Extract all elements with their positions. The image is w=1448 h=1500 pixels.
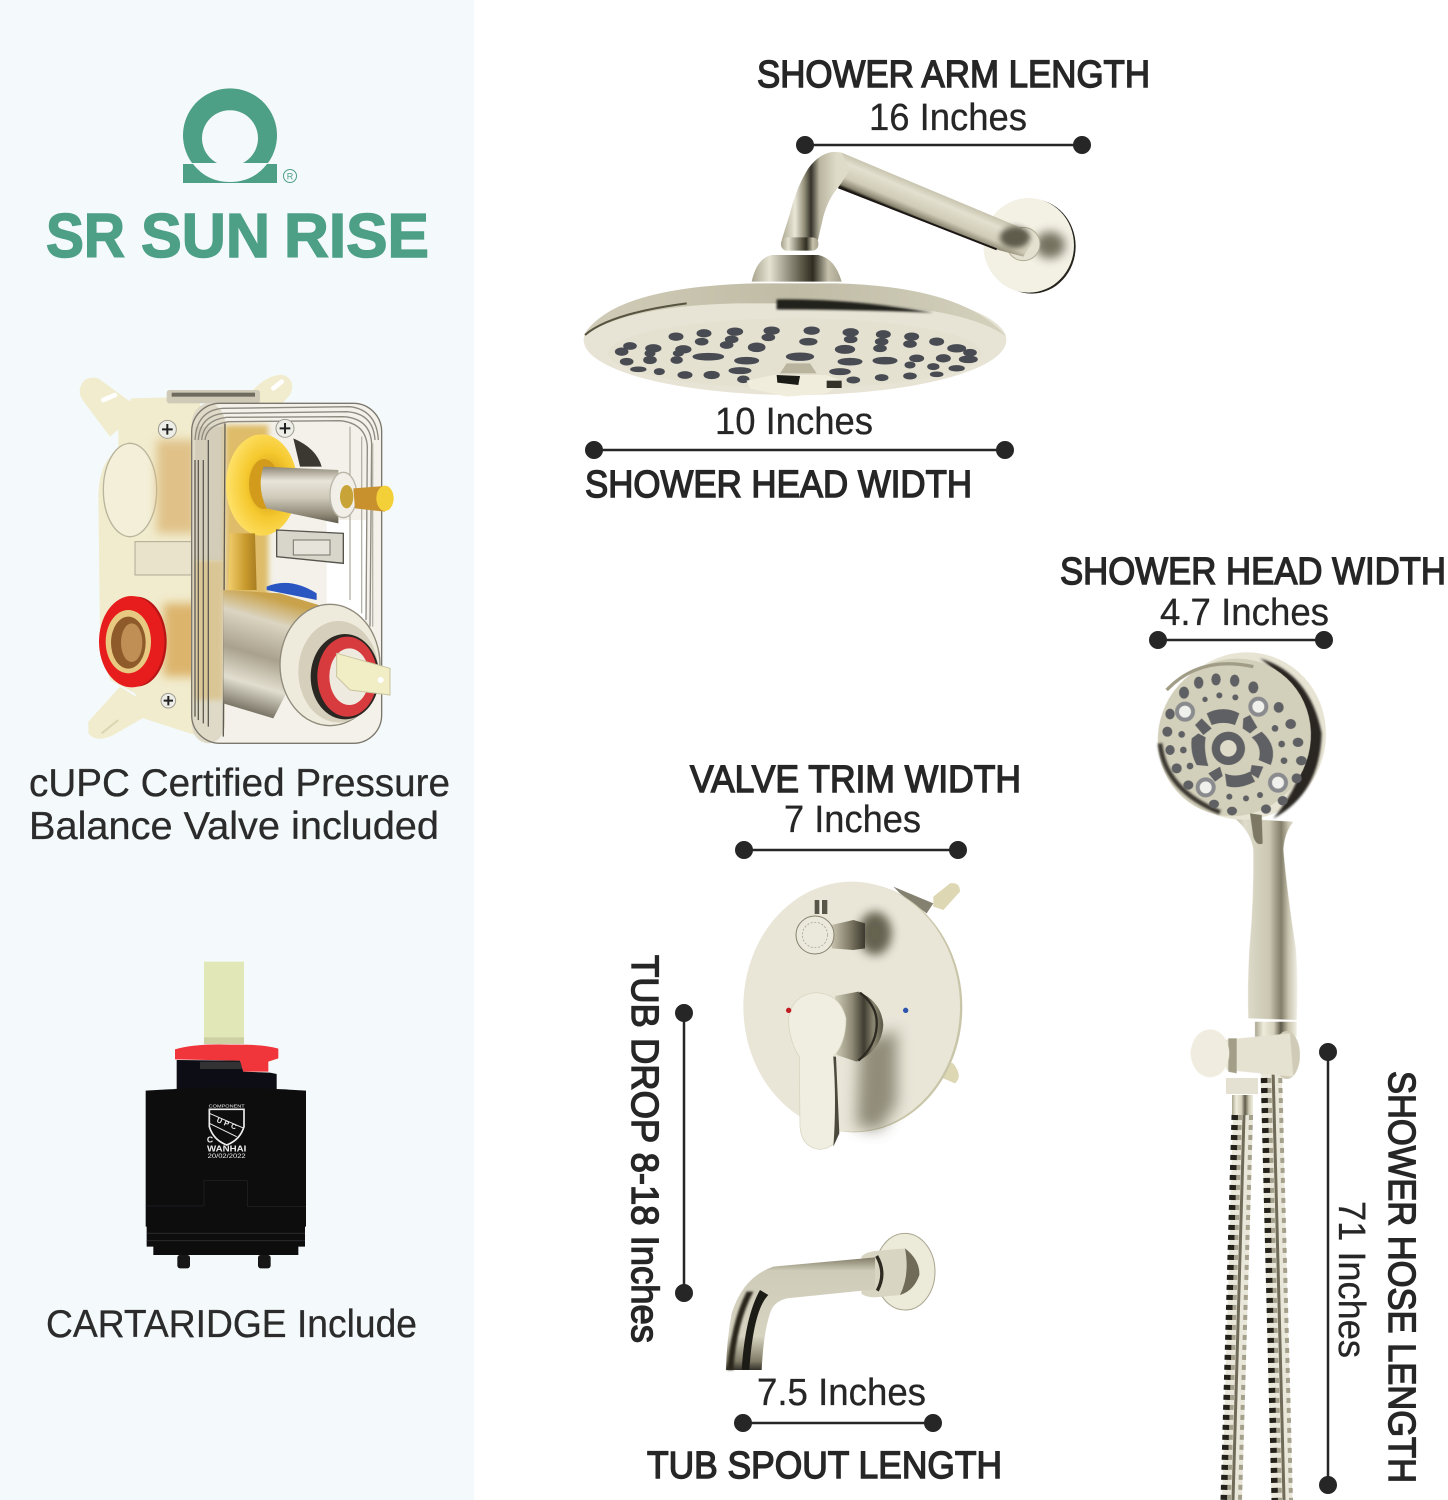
collar bbox=[860, 1248, 919, 1297]
trigger bbox=[1250, 813, 1263, 844]
swivel neck bbox=[781, 237, 818, 251]
pipe bbox=[726, 1257, 875, 1370]
red cap bbox=[175, 1044, 278, 1072]
dimension line: hose length bbox=[1320, 1044, 1336, 1494]
certification mark: 20/02/2022 bbox=[208, 1154, 247, 1160]
left hose bbox=[1224, 1115, 1251, 1500]
mounting lugs and back body bbox=[80, 375, 292, 739]
valve trim plate bbox=[743, 882, 962, 1149]
back plate edge bbox=[746, 882, 962, 1132]
certification mark: WANHAI bbox=[207, 1144, 246, 1153]
dimension line: tub spout bbox=[734, 1414, 942, 1432]
flange bbox=[875, 1233, 935, 1310]
registered mark bbox=[284, 170, 296, 182]
diverter dial bbox=[796, 916, 834, 954]
collar ring bbox=[877, 1256, 882, 1291]
certification mark bbox=[207, 1103, 247, 1160]
brass disc and silver stem bbox=[226, 434, 394, 536]
faceplate bbox=[743, 882, 960, 1132]
value: 7.5 inches: 7.5 Inches bbox=[757, 1372, 926, 1414]
jet nozzles bbox=[1177, 699, 1286, 795]
tub spout bbox=[726, 1233, 935, 1370]
housing screws bbox=[158, 419, 294, 708]
amber reflection on back body bbox=[157, 440, 197, 533]
stem bbox=[204, 962, 244, 1043]
value: 71 inches (rotated): 71 Inches bbox=[1330, 1201, 1372, 1358]
heading: shower arm length: SHOWER ARM LENGTH bbox=[757, 54, 1150, 96]
cap bbox=[752, 255, 842, 282]
arm straight section bbox=[838, 153, 1033, 257]
head rim and face bbox=[584, 285, 1006, 395]
cartridge product image bbox=[146, 962, 306, 1268]
value: 4.7 inches: 4.7 Inches bbox=[1160, 592, 1329, 634]
elbow reflections bbox=[727, 1290, 768, 1370]
logo wordmark: SUN bbox=[141, 202, 270, 271]
hand shower hoses bbox=[1224, 1068, 1291, 1500]
neck bbox=[177, 1060, 277, 1090]
handle bbox=[1235, 818, 1297, 1020]
clear housing bbox=[192, 403, 382, 743]
nozzle ring bbox=[1162, 673, 1307, 815]
dimension line: tub drop bbox=[676, 1004, 692, 1302]
icon: omega mark bbox=[183, 88, 277, 183]
spray nozzles bbox=[616, 327, 977, 383]
dimension line: shower arm bbox=[796, 136, 1090, 154]
wall plate bbox=[988, 199, 1076, 294]
base rings bbox=[147, 1225, 305, 1255]
rain shower head and arm bbox=[584, 152, 1076, 397]
inner clip and pipe bbox=[228, 530, 343, 600]
bracket bbox=[1191, 1022, 1300, 1079]
heading: tub spout length: TUB SPOUT LENGTH bbox=[647, 1445, 1002, 1487]
caption: cartridge: CARTARIDGE Include bbox=[46, 1303, 417, 1346]
registered mark: R bbox=[287, 172, 294, 182]
lever handle bbox=[788, 993, 846, 1149]
panel: left sidebar background bbox=[0, 0, 474, 1500]
red inlet port bbox=[99, 596, 167, 687]
heading: valve trim width: VALVE TRIM WIDTH bbox=[690, 759, 1021, 801]
black body bbox=[146, 1088, 306, 1227]
value: 16 inches: 16 Inches bbox=[869, 97, 1027, 139]
caption: valve bbox=[29, 762, 450, 848]
logo wordmark bbox=[46, 202, 429, 271]
certification mark: COMPONENT bbox=[209, 1103, 245, 1108]
caption: valve: cUPC Certified Pressure bbox=[29, 762, 450, 805]
dimension line: handheld width bbox=[1150, 632, 1332, 648]
center spray bbox=[1212, 732, 1245, 765]
cast shadows bbox=[858, 912, 892, 955]
hot and cold dots bbox=[786, 1008, 908, 1013]
hand shower bbox=[1132, 631, 1348, 1079]
value: 10 inches: 10 Inches bbox=[715, 401, 873, 443]
silver mixing cylinder bbox=[223, 590, 390, 726]
right hose bbox=[1264, 1068, 1291, 1500]
knockout circle bbox=[103, 443, 157, 537]
logo: SR Sunrise bbox=[46, 88, 429, 271]
label: tub drop (rotated): TUB DROP 8-18 Inches bbox=[623, 955, 665, 1343]
caption: valve: Balance Valve included bbox=[29, 805, 439, 848]
diverter stem bbox=[832, 920, 865, 950]
heading: shower head width: SHOWER HEAD WIDTH bbox=[585, 464, 972, 506]
left hose fitting bbox=[1226, 1078, 1258, 1117]
value: 7 inches: 7 Inches bbox=[784, 799, 921, 841]
certification mark: C bbox=[207, 1135, 214, 1145]
logo wordmark: SR bbox=[46, 202, 125, 271]
center diverter bbox=[747, 363, 843, 397]
certification mark: UPC bbox=[215, 1115, 239, 1132]
handle collar bbox=[835, 992, 883, 1062]
dimension line: valve trim bbox=[736, 842, 966, 858]
valve product image bbox=[80, 375, 394, 743]
dimension line: shower head width bbox=[586, 442, 1014, 458]
head body bbox=[1142, 631, 1348, 841]
mounting lugs bbox=[893, 883, 960, 1083]
arm elbow and drop bbox=[782, 152, 850, 248]
logo wordmark: RISE bbox=[284, 202, 429, 271]
